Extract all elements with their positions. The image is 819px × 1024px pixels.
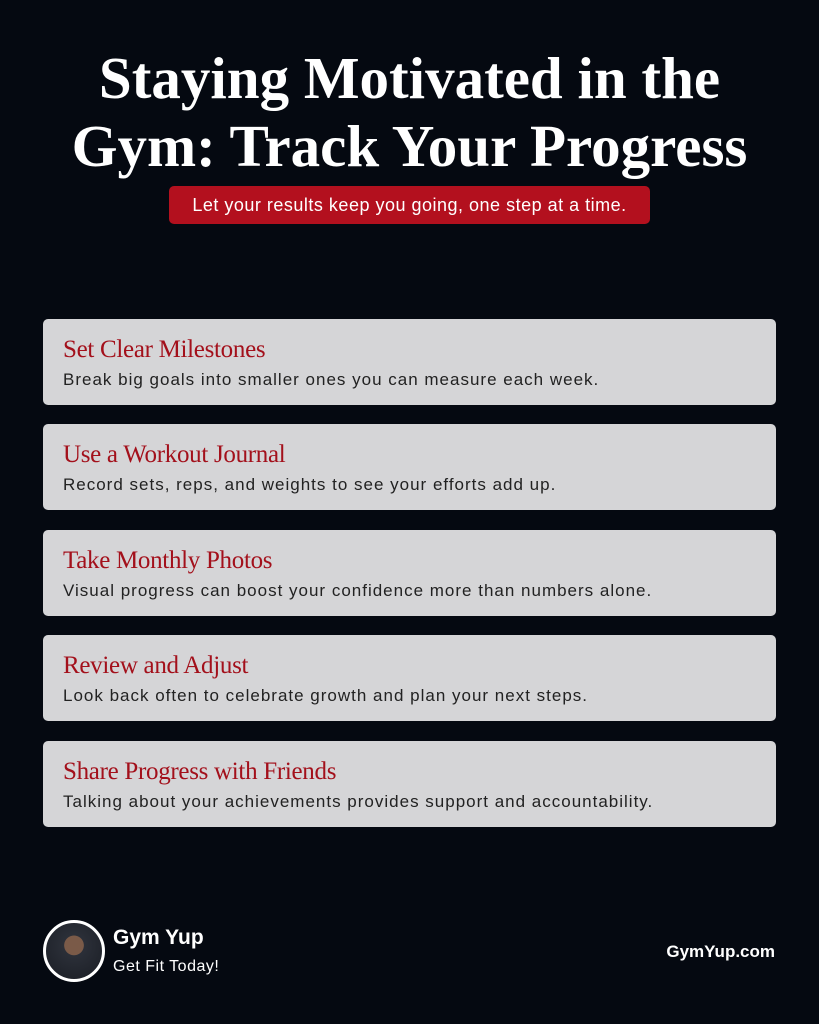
card: photos xyxy=(43,530,776,616)
card: photos: Visual progress can boost your confidence more than numbers alone. xyxy=(63,581,652,600)
title xyxy=(72,45,747,179)
card: milestones: Set Clear Milestones xyxy=(63,336,265,363)
brand name: Gym Yup xyxy=(113,926,204,949)
footer brand xyxy=(43,920,219,982)
subtitle pill xyxy=(169,186,650,224)
card: milestones: Break big goals into smaller ones you can measure each week. xyxy=(63,370,599,389)
card: share xyxy=(43,741,776,827)
card: share: Share Progress with Friends xyxy=(63,758,336,785)
card: journal: Use a Workout Journal xyxy=(63,441,285,468)
card: review xyxy=(43,635,776,721)
card: journal: Record sets, reps, and weights to see your efforts add up. xyxy=(63,475,556,494)
card: milestones xyxy=(43,319,776,405)
card: journal xyxy=(43,424,776,510)
tagline: Get Fit Today! xyxy=(113,958,219,975)
card: share: Talking about your achievements provides support and accountability. xyxy=(63,792,653,811)
card: review: Review and Adjust xyxy=(63,652,248,679)
icon: avatar xyxy=(43,920,105,982)
card: review: Look back often to celebrate growth and plan your next steps. xyxy=(63,686,588,705)
title: Staying Motivated in the xyxy=(99,45,720,111)
website: GymYup.com xyxy=(666,942,775,961)
subtitle pill: Let your results keep you going, one step at a time. xyxy=(192,195,627,215)
card: photos: Take Monthly Photos xyxy=(63,547,272,574)
title: Gym: Track Your Progress xyxy=(72,113,747,179)
